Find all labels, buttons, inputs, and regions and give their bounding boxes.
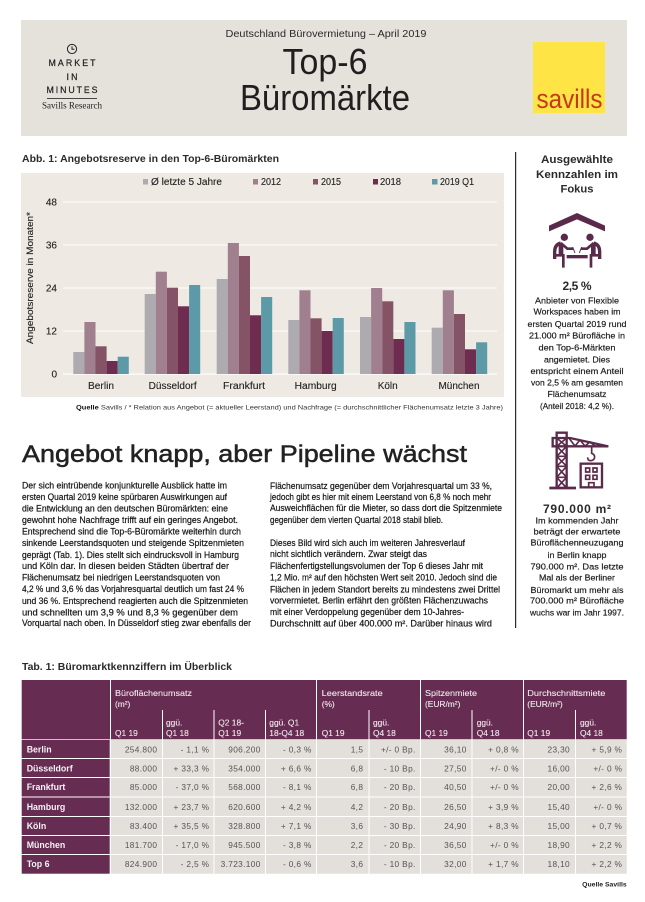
sidebar heading: Fokus	[560, 184, 594, 196]
row: Berlin: - 0,3 %	[283, 744, 312, 754]
row: München	[22, 836, 627, 854]
legend: 2012	[261, 177, 281, 188]
table header: (m²)	[115, 699, 131, 709]
row: Hamburg: Hamburg	[27, 802, 65, 812]
article text: left column	[22, 481, 251, 628]
article text: right column: jedoch gibt es hier mit einem Leerstand von 6,8 % noch mehr	[269, 492, 491, 502]
row: Köln: + 35,5 %	[174, 821, 210, 831]
text: flexible workspaces: angemietet. Dies	[544, 354, 610, 364]
row: Hamburg: 4,2	[351, 802, 363, 812]
table header: Durchschnittsmiete	[527, 688, 606, 698]
row: Köln: 24,90	[444, 821, 467, 831]
row: Düsseldorf: 88.000	[130, 763, 157, 773]
text: Berlin completions: wuchs war im Jahr 1997.	[529, 608, 624, 618]
article text: right column: Dieses Bild wird sich auch im weiteren Jahresverlauf	[270, 538, 466, 548]
market in minutes mark	[42, 58, 102, 110]
row: Top 6: Top 6	[27, 859, 50, 869]
table header: Q1 19	[115, 728, 138, 738]
article text: right column: Flächenumsatz gegenüber dem Vorjahresquartal um 33 %,	[270, 481, 492, 491]
article text: right column: Ausweichflächen für die Mieter, so dass dort die Spitzenmiete	[270, 503, 502, 513]
bar chart	[21, 173, 504, 397]
text: flexible workspaces: Workspaces haben im	[534, 307, 620, 317]
table header: Q1 18	[166, 728, 189, 738]
row: München: 181.700	[125, 840, 157, 850]
row: Frankfurt: 20,00	[547, 782, 570, 792]
text: Berlin completions: Im kommenden Jahr	[536, 516, 619, 526]
market in minutes mark: Savills Research	[42, 100, 102, 110]
table header: Leerstandsrate	[322, 688, 383, 698]
text: Berlin completions: Büromarkt um mehr als	[530, 585, 624, 595]
text: Berlin completions: 700.000 m² Bürofläche	[530, 596, 624, 606]
text: Berlin completions: beträgt der erwartete	[534, 527, 621, 537]
row: Frankfurt	[22, 778, 627, 796]
article text: left column: Flächenumsatz bei niedrigen Leerstandsquoten von	[22, 573, 220, 583]
article text: right column: vorvermietet. Berlin erfährt den größten Flächenzuwachs	[270, 596, 489, 606]
article text: left column: und 36 %. Entsprechend reagierten auch die Spitzenmieten	[22, 596, 248, 606]
y axis labels	[25, 198, 57, 380]
row: Köln: 3,6	[351, 821, 363, 831]
legend: 2015	[321, 177, 341, 188]
x axis labels	[88, 381, 480, 392]
text: flexible workspaces: den Top-6-Märkten	[538, 342, 616, 352]
table header: ggü.	[580, 718, 596, 728]
table header: ggü.	[166, 718, 182, 728]
row: München: München	[27, 840, 65, 850]
icon: clock	[67, 44, 77, 54]
table header: (%)	[322, 699, 335, 709]
article heading: Angebot knapp, aber Pipeline wächst	[22, 441, 467, 468]
legend: 2019 Q1	[440, 177, 474, 188]
market in minutes mark: MARKET	[48, 58, 96, 68]
row: Düsseldorf: 354.000	[228, 763, 261, 773]
row: München: 18,90	[547, 840, 570, 850]
row: Top 6: 3,6	[351, 859, 363, 869]
article text: right column: Durchschnitt auf über 400.000 m². Darüber hinaus wird	[270, 618, 492, 628]
text: flexible workspaces: von 2,5 % am gesamten	[531, 377, 623, 387]
text: flexible workspaces	[528, 296, 627, 411]
y axis labels: 0	[51, 370, 57, 380]
row: Top 6: - 0,6 %	[283, 859, 312, 869]
y axis labels: 48	[46, 198, 57, 208]
article text: left column: und schnellten um 3,9 % und 8,3 % gegenüber dem	[22, 608, 238, 618]
figure: 2,5 %: 2,5 %	[562, 279, 592, 293]
text: Berlin completions: Mal als der Berliner	[539, 573, 615, 583]
row: Düsseldorf: +/- 0 %	[593, 763, 623, 773]
table header: (EUR/m²)	[527, 699, 563, 709]
article text: left column: ersten Quartal 2019 keine spürbaren Auswirkungen auf	[22, 492, 228, 502]
x axis labels: Hamburg	[295, 381, 337, 392]
row: Köln: + 8,3 %	[488, 821, 519, 831]
table header: Q4 18	[477, 728, 500, 738]
row: Frankfurt: - 37,0 %	[176, 782, 210, 792]
row: Berlin	[22, 740, 627, 758]
table heading: Tab. 1: Büromarktkennziffern im Überblick	[22, 660, 232, 673]
article text: right column: Flächen in jedem Standort bereits zu mindestens zwei Drittel	[270, 584, 500, 594]
row: Düsseldorf: +/- 0 %	[490, 763, 519, 773]
table header	[22, 680, 627, 740]
row: Hamburg: + 4,2 %	[281, 802, 312, 812]
sidebar heading: Kennzahlen im	[536, 169, 618, 181]
legend: 2018	[380, 177, 401, 188]
text: flexible workspaces: ersten Quartal 2019 rund	[528, 319, 627, 329]
table header: ggü.	[373, 718, 389, 728]
row: Köln: + 0,7 %	[591, 821, 623, 831]
row: Düsseldorf: + 6,6 %	[281, 763, 312, 773]
table header: Q4 18	[580, 728, 603, 738]
row: Berlin: - 1,1 %	[181, 744, 210, 754]
text: Berlin completions	[529, 516, 624, 618]
row: Düsseldorf: + 33,3 %	[174, 763, 210, 773]
article text: left column: Entsprechend sind die Top-6-Büromärkte weiterhin durch	[22, 527, 241, 537]
row: Top 6: 32,00	[444, 859, 467, 869]
row: Top 6: + 2,2 %	[591, 859, 623, 869]
table header: Q1 19	[218, 728, 241, 738]
sidebar heading	[536, 154, 618, 196]
sidebar heading: Ausgewählte	[541, 154, 613, 166]
row: Frankfurt: - 20 Bp.	[384, 782, 416, 792]
row: Berlin: 23,30	[547, 744, 570, 754]
row: Frankfurt: 40,50	[444, 782, 467, 792]
figure: 790.000 m²: 790.000 m²	[543, 502, 611, 516]
row: Düsseldorf: Düsseldorf	[27, 763, 73, 773]
table header: ggü.	[477, 718, 493, 728]
row: Düsseldorf	[22, 759, 627, 777]
row: Berlin: 1,5	[351, 744, 363, 754]
article text: left column: Der sich eintrübende konjunkturelle Ausblick hatte im	[22, 481, 227, 491]
row: Frankfurt: Frankfurt	[27, 782, 65, 792]
text: Berlin completions: Büroflächenneuzugang	[530, 538, 624, 548]
article text: right column: mit einer Verdoppelung gegenüber dem 10-Jahres-	[270, 607, 464, 617]
table header: Büroflächenumsatz	[115, 688, 192, 698]
legend: Ø letzte 5 Jahre	[151, 177, 222, 188]
row: Berlin: 906.200	[228, 744, 261, 754]
text: flexible workspaces: Flächenumsatz	[548, 389, 606, 399]
icon: coworking people under roof	[549, 213, 605, 268]
row: Hamburg: + 23,7 %	[174, 802, 210, 812]
row: München: 945.500	[228, 840, 261, 850]
y axis labels: Angebotsreserve in Monaten*	[25, 211, 35, 344]
x axis labels: Köln	[378, 381, 398, 392]
bars: Köln	[360, 288, 416, 374]
article text: right column	[269, 481, 502, 628]
row: Top 6	[22, 855, 627, 874]
article text: right column: Flächenfertigstellungsvolumen der Top 6 dieses Jahr mit	[270, 561, 484, 571]
row: München: + 2,2 %	[591, 840, 623, 850]
y axis labels: 12	[46, 326, 57, 338]
row: Frankfurt: - 8,1 %	[283, 782, 312, 792]
row: Düsseldorf: 16,00	[547, 763, 570, 773]
row: Köln: 328.800	[228, 821, 261, 831]
row: Frankfurt: 568.000	[228, 782, 261, 792]
article text: left column: 4,2 % und 3,6 % das Vorjahresquartal deutlich um fast 24 %	[22, 584, 244, 594]
row: Hamburg: +/- 0 %	[593, 802, 623, 812]
report subtitle: Deutschland Bürovermietung – April 2019	[226, 29, 426, 40]
row: Top 6: 3.723.100	[221, 859, 261, 869]
y axis labels: 36	[46, 240, 57, 252]
row: Hamburg: + 3,9 %	[488, 802, 519, 812]
x axis labels: München	[438, 381, 480, 392]
icon: crane and building	[549, 433, 608, 488]
savills logo: savills	[536, 84, 602, 114]
row: Düsseldorf: - 10 Bp.	[384, 763, 416, 773]
text: flexible workspaces: 21.000 m² Bürofläche in	[529, 330, 625, 340]
table source note: Quelle Savills	[582, 882, 627, 888]
y axis labels: 24	[46, 284, 57, 294]
chart source note: Quelle Savills / * Relation aus Angebot (= aktueller Leerstand) und Nachfrage (= durchschnittlicher Flächenumsatz letzte 3 Jahre)	[76, 404, 503, 412]
legend	[143, 177, 474, 188]
row: Köln: - 30 Bp.	[384, 821, 416, 831]
row: München: 2,2	[351, 840, 363, 850]
title: Büromärkte	[240, 77, 410, 118]
article text: left column: Vorquartal nach oben. In Düsseldorf stieg zwar ebenfalls der	[22, 618, 251, 628]
text: Berlin completions: 790.000 m². Das letzte	[530, 562, 624, 572]
table: market figures	[22, 680, 627, 874]
table header: Q4 18	[373, 728, 396, 738]
sidebar panel	[515, 152, 627, 628]
article text: right column: gegenüber dem vierten Quartal 2018 stabil blieb.	[270, 515, 443, 525]
table header: 18-Q4 18	[269, 728, 305, 738]
article text: left column: die Entwicklung an den deutschen Büromärkten: eine	[22, 504, 228, 514]
bars: Berlin	[73, 322, 129, 374]
chart heading: Abb. 1: Angebotsreserve in den Top-6-Büromärkten	[22, 154, 279, 165]
bars: Hamburg	[288, 290, 344, 374]
row: Berlin: + 5,9 %	[591, 744, 623, 754]
article text: left column: gewohnt hohe Nachfrage trifft auf ein geringes Angebot.	[22, 515, 238, 525]
x axis labels: Düsseldorf	[149, 381, 197, 392]
table header: (EUR/m²)	[425, 699, 461, 709]
article text: right column: 1,2 Mio. m² auf den höchsten Wert seit 2010. Jedoch sind die	[270, 573, 497, 583]
text: Berlin completions: in Berlin knapp	[548, 550, 607, 560]
row: München: - 20 Bp.	[384, 840, 416, 850]
table header: Spitzenmiete	[425, 688, 477, 698]
row: Frankfurt: 85.000	[130, 782, 157, 792]
bars: Düsseldorf	[145, 272, 200, 374]
row: Hamburg: - 20 Bp.	[384, 802, 416, 812]
table header: Q1 19	[322, 728, 345, 738]
row: Top 6: + 1,7 %	[488, 859, 519, 869]
market in minutes mark: MINUTES	[46, 85, 98, 95]
row: Köln: Köln	[27, 821, 46, 831]
row: Hamburg: 132.000	[125, 802, 157, 812]
row: Berlin: + 0,8 %	[488, 744, 519, 754]
article text: right column: nicht sichtlich verändern. Zwar steigt das	[270, 549, 428, 559]
row: Top 6: 824.900	[125, 859, 157, 869]
row: Hamburg: 620.600	[228, 802, 261, 812]
text: flexible workspaces: (Anteil 2018: 4,2 %).	[540, 401, 614, 411]
row: München: - 3,8 %	[283, 840, 312, 850]
row: Frankfurt: +/- 0 %	[490, 782, 519, 792]
row: München: 36,50	[444, 840, 467, 850]
row: Köln: 15,00	[547, 821, 570, 831]
table header: ggü. Q1	[269, 718, 299, 728]
text: flexible workspaces: entspricht einem Anteil	[530, 366, 624, 376]
x axis labels: Berlin	[88, 381, 114, 392]
row: Top 6: - 2,5 %	[181, 859, 210, 869]
row: Köln: + 7,1 %	[281, 821, 312, 831]
bars: München	[432, 290, 487, 374]
table header: Q1 19	[425, 728, 448, 738]
row: Hamburg	[22, 798, 627, 816]
row: Top 6: - 10 Bp.	[384, 859, 416, 869]
text: flexible workspaces: Anbieter von Flexible	[535, 296, 619, 306]
title	[240, 41, 410, 118]
savills logo	[533, 42, 605, 114]
bars: Frankfurt	[217, 243, 272, 374]
row: Düsseldorf: 27,50	[444, 763, 467, 773]
article text: left column: sinkende Leerstandsquoten und steigende Spitzenmieten	[22, 538, 244, 548]
row: München: +/- 0 %	[490, 840, 519, 850]
x axis labels: Frankfurt	[223, 381, 265, 392]
row: Frankfurt: + 2,6 %	[591, 782, 623, 792]
row: Köln: 83.400	[130, 821, 157, 831]
row: Köln	[22, 817, 627, 835]
row: Berlin: 254.800	[125, 744, 157, 754]
table header: Q1 19	[527, 728, 550, 738]
row: Top 6: 18,10	[547, 859, 570, 869]
row: Hamburg: 15,40	[547, 802, 570, 812]
row: Berlin: 36,10	[444, 744, 467, 754]
article text: left column: geprägt (Tab. 1). Dies stellt sich eindrucksvoll in Hamburg	[22, 550, 239, 560]
row: Frankfurt: 6,8	[351, 782, 363, 792]
title: Top-6	[282, 41, 368, 82]
market in minutes mark: IN	[66, 72, 78, 82]
article text: left column: und Köln dar. In diesen beiden Städten übertraf der	[22, 561, 229, 571]
row: Berlin: +/- 0 Bp.	[381, 744, 416, 754]
header banner	[21, 20, 627, 136]
row: Berlin: Berlin	[27, 744, 52, 754]
row: Hamburg: 26,50	[444, 802, 467, 812]
table header: Q2 18-	[218, 718, 244, 728]
row: Düsseldorf: 6,8	[351, 763, 363, 773]
row: München: - 17,0 %	[176, 840, 210, 850]
